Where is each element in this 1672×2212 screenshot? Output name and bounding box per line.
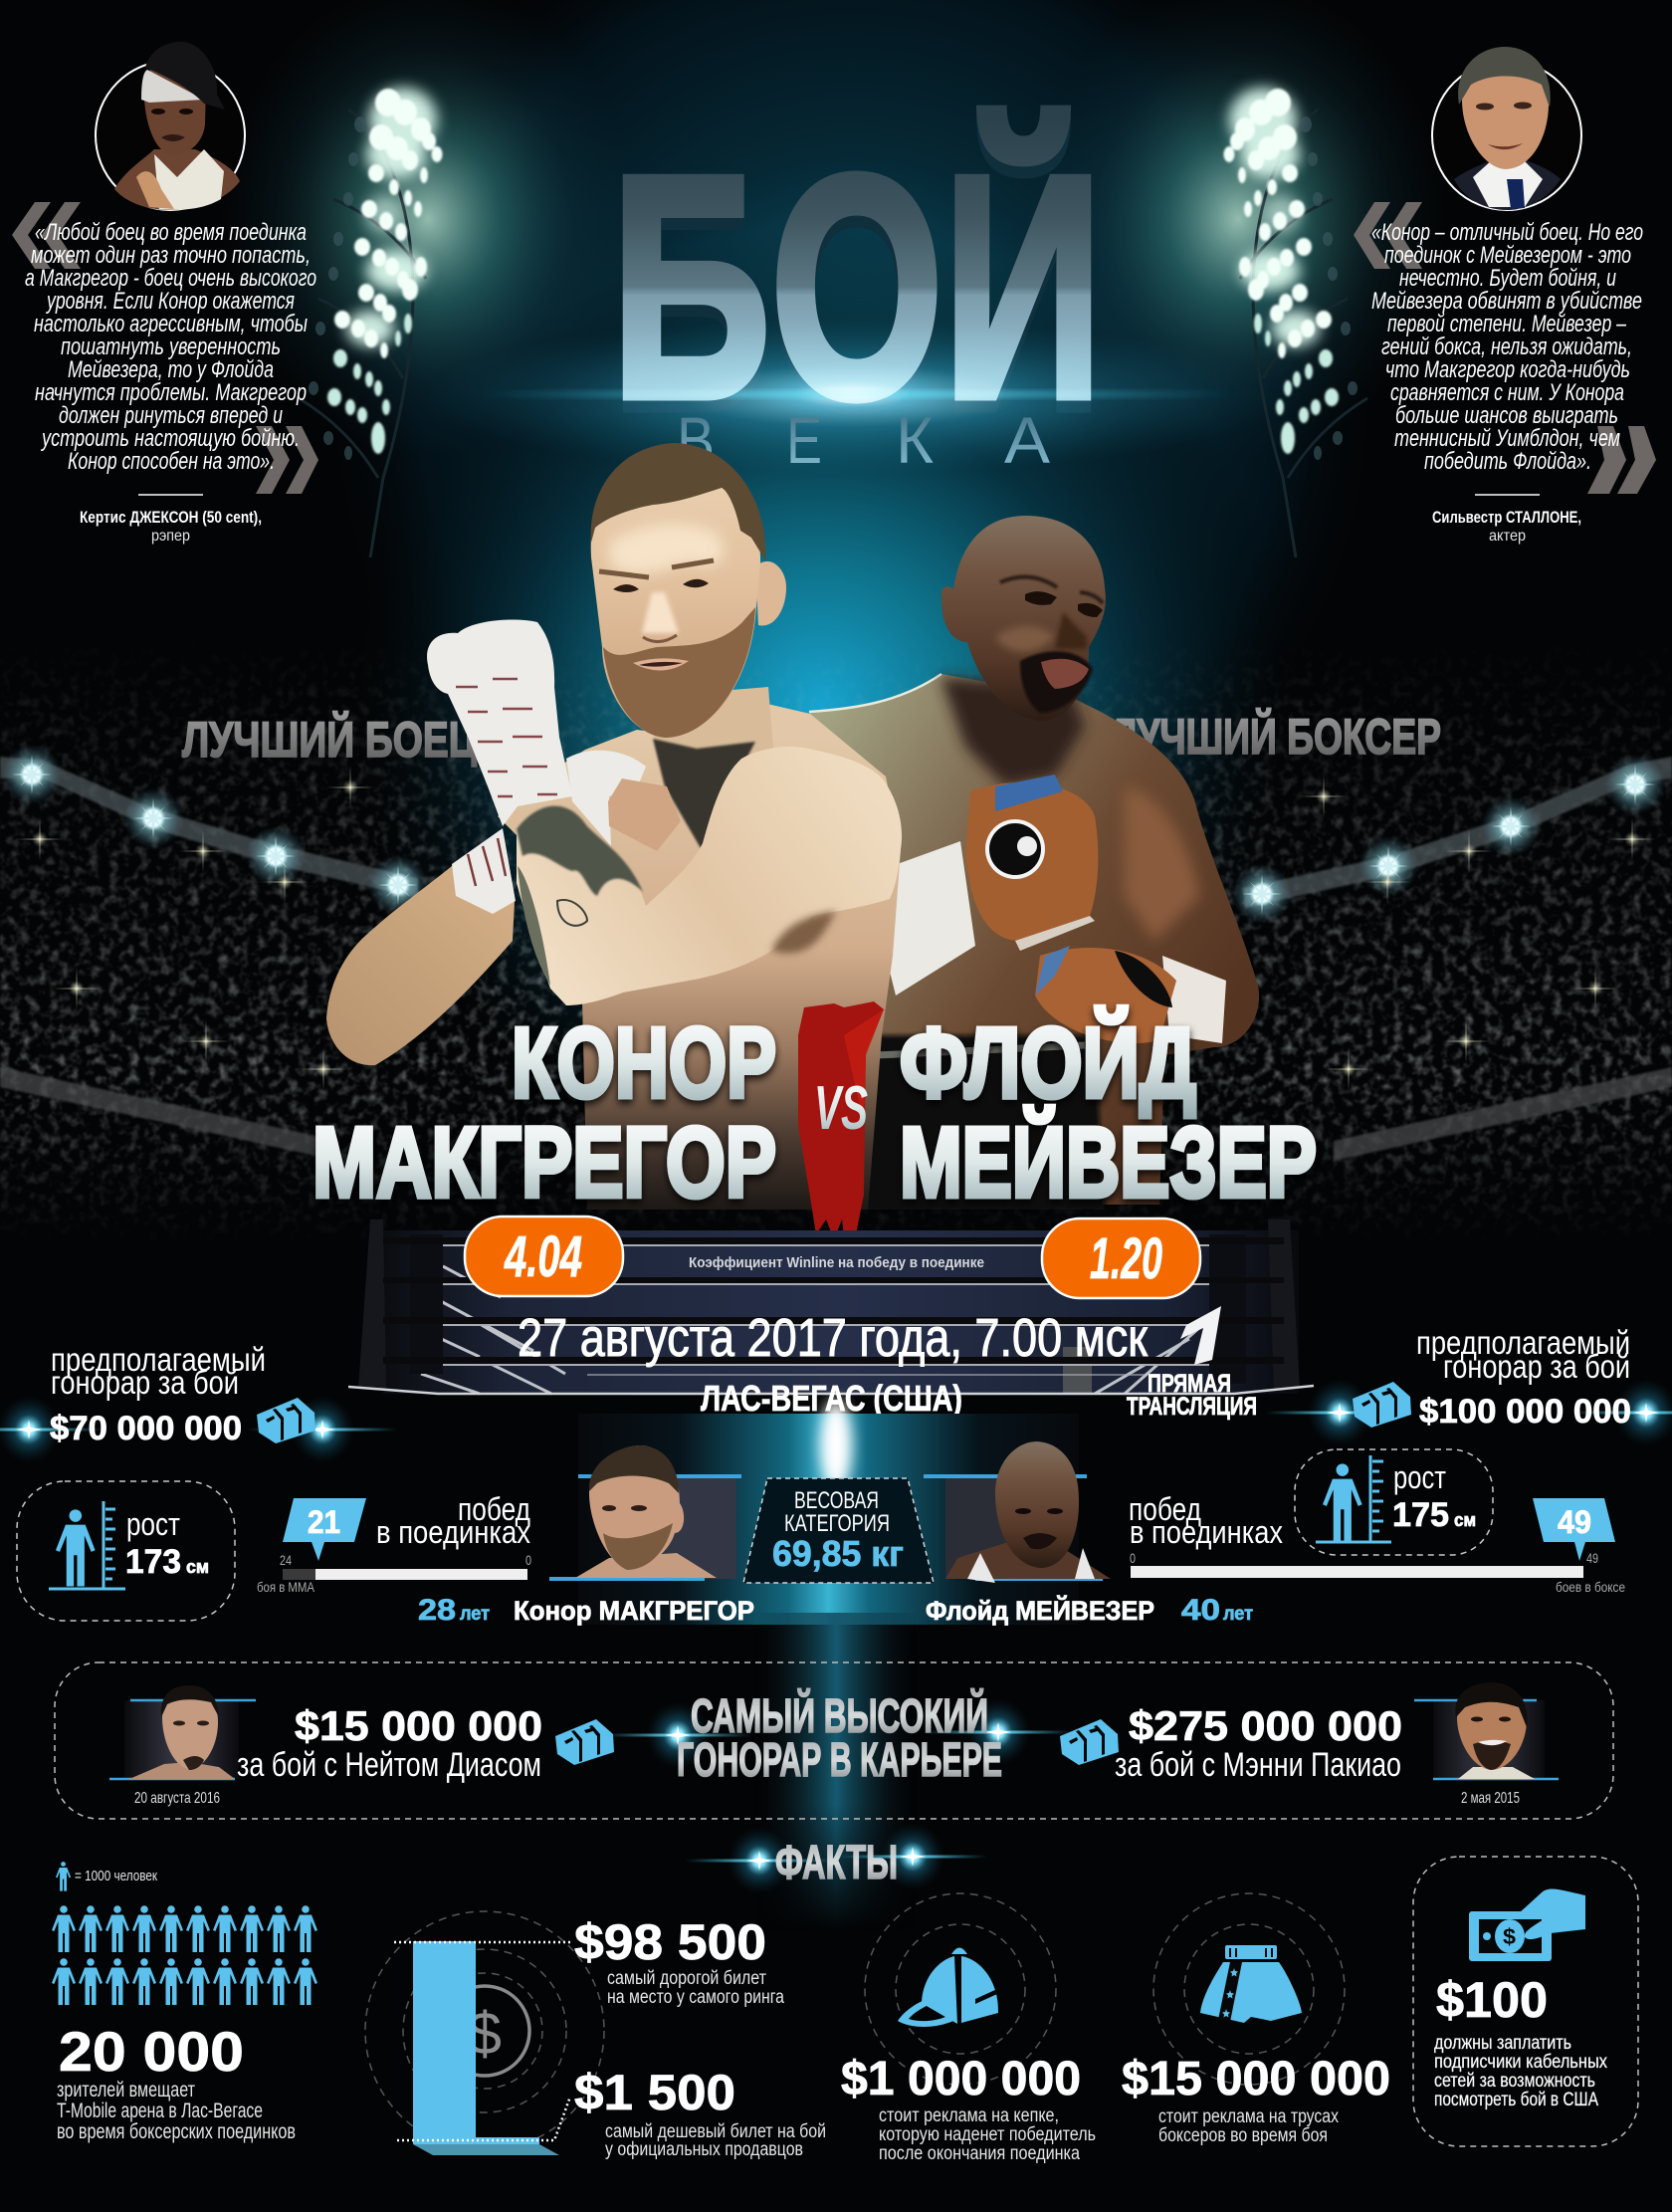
- heading: highest fee: САМЫЙ ВЫСОКИЙ: [691, 1688, 988, 1743]
- fee: McGregor: гонорар за бой: [51, 1364, 239, 1401]
- fee: McGregor: предполагаемый: [51, 1341, 266, 1378]
- fee: Pacquiao fight: за бой с Мэнни Пакиао: [1115, 1746, 1401, 1784]
- legend: person icon: [56, 1862, 157, 1891]
- pictogram: 20 000 spectators: [52, 1905, 317, 2005]
- wins: McGregor: 24: [280, 1552, 292, 1568]
- name: Флойд Мейвезер: [900, 1006, 1317, 1218]
- broadcast label: ПРЯМАЯ: [1148, 1370, 1231, 1398]
- wins: Mayweather: в поединках: [1130, 1514, 1283, 1550]
- name: Флойд Мейвезер: ФЛОЙД: [900, 1006, 1196, 1119]
- heading: facts: ФАКТЫ: [775, 1837, 898, 1889]
- height: McGregor: рост: [126, 1506, 180, 1542]
- quote: 50 Cent: [12, 202, 318, 545]
- fee: Mayweather: предполагаемый: [1416, 1324, 1630, 1361]
- head: [591, 443, 786, 738]
- name: Конор Макгрегор: МАКГРЕГОР: [313, 1107, 776, 1218]
- quote: Sylvester Stallone: актер: [1489, 528, 1526, 545]
- quote: 50 Cent: начнутся проблемы. Макгрегор: [35, 379, 307, 406]
- fact: cap advertising: стоит реклама на кепке,: [879, 2105, 1059, 2126]
- arena crowd background: [0, 637, 1672, 1244]
- wins: Mayweather: 49: [1558, 1504, 1591, 1540]
- wins: Mayweather: боев в боксе: [1556, 1579, 1625, 1595]
- quote: 50 Cent: должен ринуться вперед и: [59, 402, 283, 429]
- wins: Mayweather: 0: [1130, 1550, 1136, 1566]
- stat: cheapest ticket: $1 500: [574, 2065, 735, 2120]
- title: ВЕКА: К: [896, 403, 935, 477]
- height: Mayweather: см: [1454, 1510, 1476, 1530]
- quote: Sylvester Stallone: [1354, 202, 1656, 545]
- age and name: Mayweather: [926, 1594, 1253, 1627]
- heading: facts: [685, 1823, 987, 1894]
- fee: Diaz fight: [237, 1702, 614, 1784]
- age and name: McGregor: 28: [418, 1594, 456, 1627]
- hand: [608, 778, 681, 851]
- title: [611, 110, 1103, 476]
- fact: $100 pay-per-view: сетей за возможность: [1434, 2071, 1595, 2092]
- age and name: McGregor: лет: [460, 1604, 490, 1625]
- height: McGregor: [17, 1481, 235, 1621]
- odds pill: McGregor: 4.04: [504, 1224, 582, 1289]
- fact: $100 pay-per-view: [1413, 1857, 1638, 2146]
- floodlight right: [1029, 0, 1447, 557]
- fact: $100 pay-per-view: посмотреть бой в США: [1434, 2090, 1598, 2110]
- fee: Mayweather: гонорар за бой: [1443, 1348, 1630, 1385]
- quote: 50 Cent: Кертис ДЖЕКСОН (50 cent),: [80, 508, 262, 527]
- icon: Channel One logo: [1180, 1306, 1221, 1365]
- name: Конор Макгрегор: КОНОР: [512, 1007, 776, 1119]
- weight category: КАТЕГОРИЯ: [784, 1510, 890, 1537]
- heading: лучший боец: ЛУЧШИЙ БОЕЦ: [182, 711, 477, 768]
- arm tattoo: [517, 806, 643, 896]
- panel: highest career fee: [55, 1662, 1613, 1819]
- fact: $100 pay-per-view: подписчики кабельных: [1434, 2052, 1607, 2073]
- fact: shorts advertising: $15 000 000: [1122, 2053, 1390, 2105]
- stat: most expensive ticket: самый дорогой билет: [607, 1968, 766, 1989]
- odds pill: Mayweather: [1042, 1218, 1200, 1298]
- wins: Mayweather: побед: [1129, 1491, 1201, 1527]
- stat: most expensive ticket: [574, 1914, 784, 2008]
- fact: $100 pay-per-view: должны заплатить: [1434, 2033, 1571, 2054]
- quote: 50 Cent: уровня. Если Конор окажется: [46, 288, 295, 315]
- title: БОЙ: [611, 121, 1103, 476]
- fee: McGregor: $70 000 000: [50, 1410, 242, 1447]
- title: ВЕКА: В: [677, 403, 715, 477]
- stat: most expensive ticket: $98 500: [574, 1914, 766, 1970]
- heading: лучший боксер: ЛУЧШИЙ БОКСЕР: [1111, 708, 1441, 765]
- center glow panel: [578, 1400, 1079, 1931]
- height: McGregor: см: [186, 1557, 209, 1577]
- floodlight left: [219, 0, 637, 557]
- icon: hand with banknote: $: [1503, 1924, 1516, 1949]
- icon: hand with banknote: [1469, 1889, 1585, 1961]
- name: red slash with VS: [798, 1001, 884, 1252]
- fighter: Floyd Mayweather: [809, 516, 1259, 1210]
- icon: cap: [898, 1947, 998, 2027]
- fact: shorts advertising: стоит реклама на трусах: [1158, 2106, 1339, 2127]
- portrait: Floyd small: [924, 1441, 1111, 1583]
- odds pill: McGregor: [465, 1217, 623, 1296]
- location: ЛАС-ВЕГАС (США): [701, 1378, 962, 1419]
- age and name: McGregor: Конор МАКГРЕГОР: [514, 1596, 754, 1626]
- quote: 50 Cent: настолько агрессивным, чтобы: [34, 311, 308, 337]
- legend: person icon: = 1000 человек: [75, 1868, 157, 1884]
- height: Mayweather: [1295, 1449, 1493, 1555]
- height: Mayweather: рост: [1393, 1459, 1446, 1495]
- quote: 50 Cent: Конор способен на это».: [68, 448, 275, 475]
- stat: 20 000: зрителей вмещает: [57, 2079, 195, 2101]
- quote: 50 Cent: рэпер: [151, 528, 190, 545]
- upper arm: [517, 747, 902, 1005]
- neck tattoo: [653, 739, 755, 848]
- portrait: 50 Cent: [96, 42, 245, 210]
- wins: Mayweather: [1129, 1491, 1625, 1595]
- fact: cap advertising: после окончания поединка: [879, 2143, 1080, 2164]
- name: Флойд Мейвезер: МЕЙВЕЗЕР: [900, 1106, 1317, 1218]
- fee: Mayweather: [1265, 1324, 1672, 1446]
- height: Mayweather: 175: [1392, 1496, 1449, 1534]
- height: McGregor: 173: [125, 1543, 181, 1581]
- date: 27 августа 2017 года, 7.00 мск: [518, 1308, 1148, 1368]
- wins: McGregor: боя в ММА: [257, 1579, 315, 1595]
- odds pill: Mayweather: 1.20: [1090, 1226, 1162, 1291]
- quote: 50 Cent: а Макгрегор - боец очень высокого: [25, 265, 316, 292]
- fact: $100 pay-per-view: $100: [1436, 1972, 1548, 2028]
- name: red slash with VS: VS: [814, 1074, 868, 1143]
- wins: McGregor: 0: [525, 1552, 531, 1568]
- fee: Diaz fight: $15 000 000: [295, 1702, 542, 1749]
- icon: boxing shorts: [1200, 1945, 1302, 2023]
- quote: 50 Cent: может один раз точно попасть,: [31, 242, 311, 269]
- quote: 50 Cent: устроить настоящую бойню.: [40, 425, 300, 452]
- age and name: McGregor: [418, 1594, 754, 1627]
- title: ВЕКА: [677, 403, 1050, 477]
- second wrap: [566, 751, 646, 846]
- far arm: [326, 861, 515, 1065]
- quote: Sylvester Stallone: победить Флойда».: [1424, 448, 1591, 475]
- portrait: Manny Pacquiao: [1414, 1682, 1559, 1779]
- chart: ticket prices: $: [468, 2000, 502, 2067]
- fee: McGregor: [0, 1341, 397, 1463]
- wins: McGregor: в поединках: [376, 1514, 530, 1550]
- wrist wrap: [452, 828, 516, 914]
- fee: Pacquiao fight: $275 000 000: [1129, 1702, 1402, 1749]
- stat: 20 000: [57, 2020, 296, 2143]
- title: ВЕКА: А: [1004, 403, 1050, 477]
- age and name: Mayweather: Флойд МЕЙВЕЗЕР: [926, 1595, 1154, 1626]
- portrait: Nate Diaz: [109, 1685, 256, 1779]
- title: БОЙ: [611, 110, 1103, 464]
- fee: Mayweather: $100 000 000: [1419, 1393, 1631, 1431]
- broadcast label: ТРАНСЛЯЦИЯ: [1127, 1393, 1257, 1421]
- portrait: Sylvester Stallone: [1432, 47, 1581, 210]
- quote: 50 Cent: пошатнуть уверенность: [61, 333, 281, 360]
- quote: 50 Cent: Мейвезера, то у Флойда: [68, 356, 274, 383]
- broadcast label: [1127, 1370, 1257, 1421]
- stat: cheapest ticket: [574, 2065, 826, 2160]
- heading: highest fee: ГОНОРАР В КАРЬЕРЕ: [677, 1734, 1002, 1787]
- torso: [498, 704, 901, 1210]
- fact: shorts advertising: боксеров во время боя: [1158, 2125, 1328, 2146]
- fact: cap advertising: $1 000 000: [841, 2053, 1081, 2105]
- age and name: Mayweather: 40: [1181, 1594, 1220, 1627]
- raised wrapped hand: [427, 620, 572, 826]
- fact: shorts advertising: [1122, 1893, 1390, 2146]
- fee: Diaz fight: за бой с Нейтом Диасом: [237, 1746, 541, 1784]
- fact: cap advertising: [841, 1893, 1096, 2164]
- weight category: [743, 1478, 934, 1583]
- date: 20 августа 2016: [134, 1790, 220, 1807]
- age and name: Mayweather: лет: [1223, 1604, 1253, 1625]
- odds caption: Коэффициент Winline на победу в поединке: [689, 1254, 984, 1271]
- stat: 20 000: 20 000: [59, 2020, 244, 2083]
- fighter: Conor McGregor: [326, 443, 902, 1210]
- chart: ticket prices: [365, 1911, 604, 2155]
- stat: 20 000: T-Mobile арена в Лас-Вегасе: [57, 2100, 263, 2122]
- portrait: Conor small: [549, 1445, 741, 1579]
- date: 2 мая 2015: [1461, 1790, 1520, 1807]
- weight category: 69,85 кг: [772, 1533, 904, 1574]
- stat: 20 000: во время боксерских поединков: [57, 2120, 296, 2143]
- heading: highest fee: [603, 1688, 1073, 1787]
- name: Конор Макгрегор: [313, 1007, 776, 1218]
- wins: McGregor: побед: [458, 1491, 530, 1527]
- quote: 50 Cent: «Любой боец во время поединка: [35, 219, 307, 246]
- title: ВЕКА: Е: [786, 403, 822, 477]
- wins: McGregor: 21: [308, 1504, 340, 1540]
- wins: McGregor: [257, 1491, 531, 1595]
- fact: cap advertising: которую наденет победитель: [879, 2124, 1096, 2145]
- fee: Pacquiao fight: [1060, 1702, 1402, 1784]
- wins: Mayweather: 49: [1586, 1550, 1598, 1566]
- quote: Sylvester Stallone: Сильвестр СТАЛЛОНЕ,: [1432, 508, 1581, 527]
- stat: cheapest ticket: самый дешевый билет на бой: [605, 2121, 826, 2142]
- stat: most expensive ticket: на место у самого ринга: [607, 1987, 784, 2008]
- boxing ring: [348, 1219, 1314, 1394]
- weight category: ВЕСОВАЯ: [794, 1487, 879, 1514]
- light flare behind title: [424, 319, 1280, 474]
- stat: cheapest ticket: у официальных продавцов: [605, 2139, 803, 2160]
- neck: [647, 687, 776, 806]
